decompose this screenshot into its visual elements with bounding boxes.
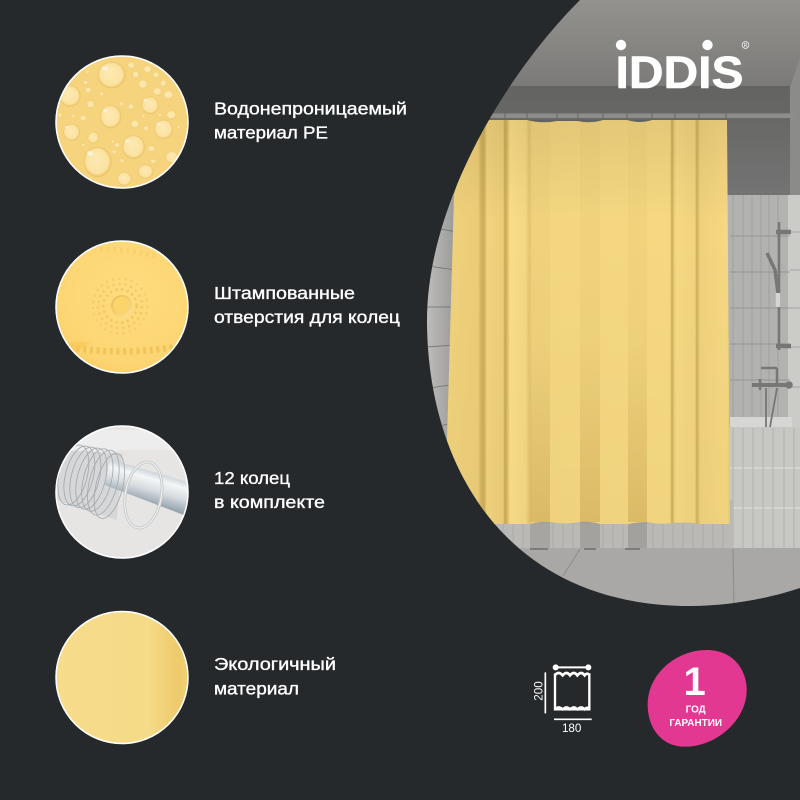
warranty badge: ГАРАНТИИ xyxy=(669,718,722,729)
feature 3 image: rod with rings xyxy=(52,426,190,558)
curtain xyxy=(447,120,730,524)
feature 1 text: материал РЕ xyxy=(214,122,328,142)
lower wall band xyxy=(476,500,733,549)
icon: curtain dimensions: 180 xyxy=(562,722,582,735)
feature 3 text: 12 колец xyxy=(214,468,290,488)
rod xyxy=(490,114,790,118)
feature 2 image: punched hole xyxy=(56,241,188,373)
feature 4 text xyxy=(214,654,336,698)
feature 3 text xyxy=(214,468,325,512)
feature 1 ring xyxy=(56,56,188,188)
side tiles left of curtain xyxy=(427,170,464,480)
photo: bathroom with curtain xyxy=(420,0,800,610)
feature 1 text xyxy=(214,98,407,142)
right wall xyxy=(790,58,800,200)
icon: curtain dimensions xyxy=(533,664,592,735)
feature 4 text: материал xyxy=(214,678,299,698)
shower set xyxy=(752,222,792,427)
icon: curtain dimensions: 200 xyxy=(533,681,546,701)
feature 2 text xyxy=(214,283,400,327)
logo: R xyxy=(744,43,748,49)
feature 4 text: Экологичный xyxy=(214,654,336,674)
logo: IDDIS xyxy=(616,47,744,98)
warranty badge: ГОД xyxy=(686,705,706,716)
wall tiles xyxy=(725,195,800,430)
warranty badge: 1 xyxy=(684,660,706,704)
feature 1 text: Водонепроницаемый xyxy=(214,98,407,118)
feature 2 text: отверстия для колец xyxy=(214,307,400,327)
back wall xyxy=(452,86,790,198)
feature 3 ring xyxy=(56,426,188,558)
warranty badge xyxy=(648,650,747,747)
bathtub front tiles xyxy=(729,427,800,548)
floor xyxy=(518,548,800,606)
feature 3 text: в комплекте xyxy=(214,492,325,512)
ceiling xyxy=(510,0,800,87)
feature 4 image: material swatch xyxy=(56,612,188,744)
feature 1 image: water drops xyxy=(56,56,188,188)
feature 2 text: Штампованные xyxy=(214,283,355,303)
feature 2 ring xyxy=(56,241,188,373)
